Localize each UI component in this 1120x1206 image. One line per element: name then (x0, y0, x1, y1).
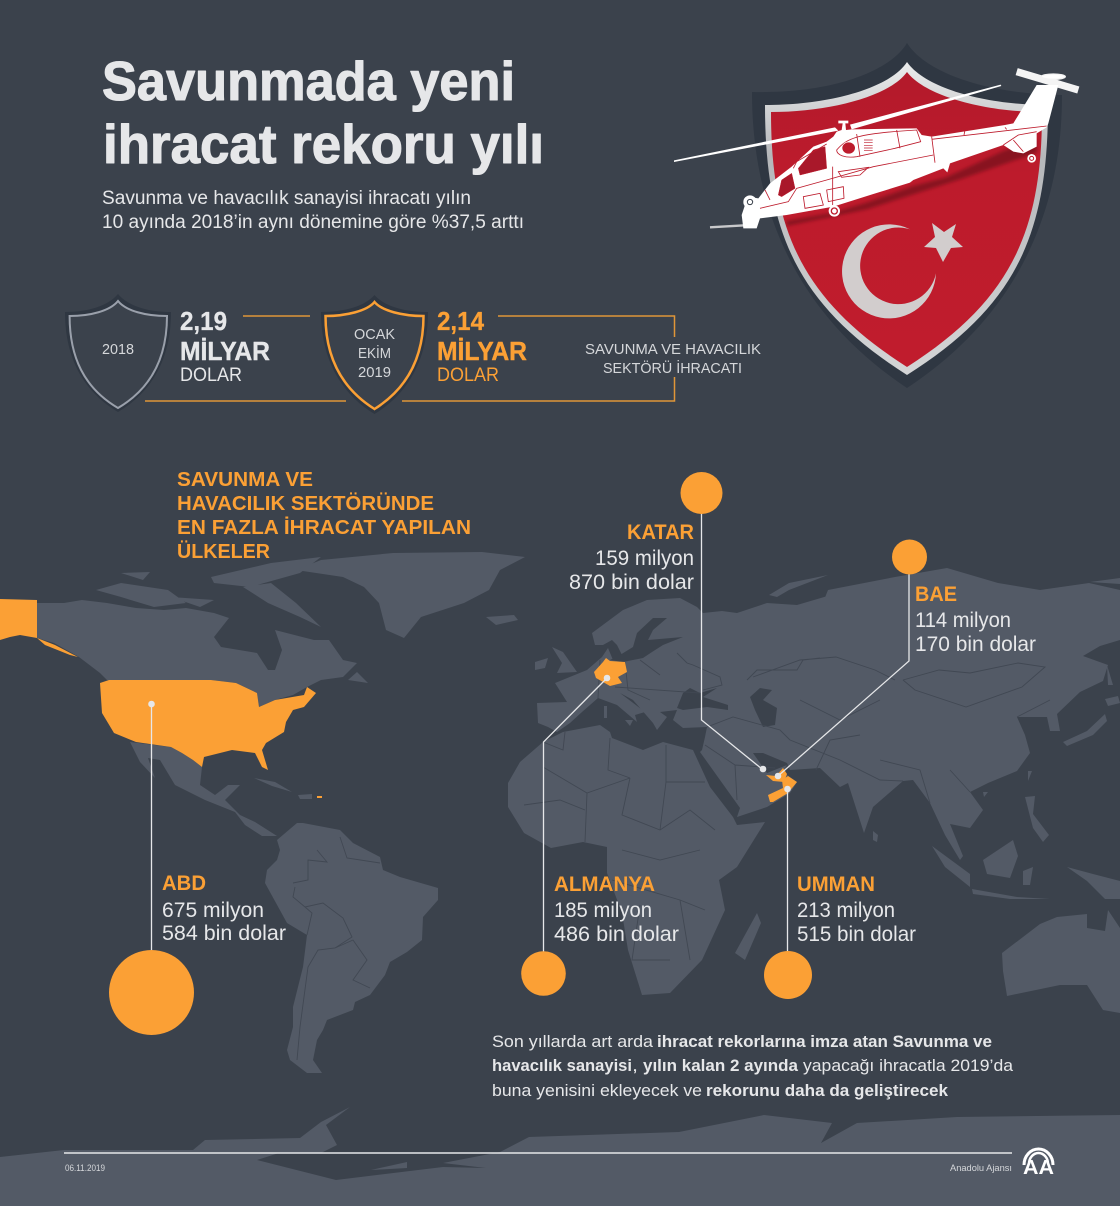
land: Antarctic island (371, 1162, 407, 1170)
shield dark outer (752, 43, 1062, 388)
panel lines (760, 126, 1047, 208)
land: South America (265, 823, 438, 1073)
label (554, 873, 679, 946)
subtitle: 10 ayında 2018’in aynı dönemine göre %37,5 arttı (102, 212, 524, 233)
land: Africa (508, 725, 765, 995)
stat 2018 value (180, 306, 270, 386)
closing paragraph: , (632, 1056, 638, 1075)
fuselage (742, 85, 1058, 228)
location dot (148, 701, 155, 707)
stat 2018 value: DOLAR (180, 365, 242, 386)
leader line (778, 572, 909, 776)
leader line (786, 789, 788, 953)
label: BAE (915, 583, 957, 606)
land: Canada (37, 600, 357, 707)
section heading: EN FAZLA İHRACAT YAPILAN (177, 516, 471, 539)
subtitle: Savunma ve havacılık sanayisi ihracatı yılın (102, 188, 471, 209)
label (797, 873, 916, 946)
label: 515 bin dolar (797, 923, 916, 946)
footer rule (64, 1152, 1012, 1154)
stat 2019 value (437, 306, 527, 386)
label: 114 milyon (915, 609, 1011, 632)
closing paragraph: ihracat rekorlarına imza atan Savunma ve (657, 1032, 992, 1051)
location dot (760, 766, 766, 772)
label: 159 milyon (595, 547, 694, 570)
land: Antarctica (0, 1107, 1120, 1206)
value circle (892, 540, 927, 574)
highlighted: Germany (594, 658, 627, 686)
shield silver border (765, 62, 1048, 375)
main rotor blades (674, 85, 1001, 162)
leader line (150, 704, 152, 952)
tail wheel (1027, 154, 1036, 163)
section heading: HAVACILIK SEKTÖRÜNDE (177, 492, 434, 515)
label period: EKİM (358, 344, 391, 362)
label period (354, 326, 395, 381)
callout: Almanya (521, 675, 679, 996)
closing paragraph: yapacağı ihracatla 2019’da (803, 1056, 1014, 1075)
label: ABD (162, 872, 206, 895)
callout: ABD (109, 701, 286, 1035)
location dot (604, 675, 610, 681)
label: 213 milyon (797, 899, 895, 922)
subtitle (102, 188, 524, 233)
label (915, 583, 1036, 656)
highlighted: UAE (766, 768, 787, 782)
closing paragraph: buna yenisini ekleyecek ve (492, 1081, 702, 1100)
cockpit windows (778, 147, 827, 197)
value circle (680, 472, 722, 514)
label period: OCAK (354, 326, 395, 343)
shield 2018 (65, 294, 171, 412)
land: Mexico and Central America (130, 742, 277, 836)
closing paragraph (492, 1032, 1014, 1100)
label: 870 bin dolar (569, 571, 694, 594)
exhaust grille (864, 140, 873, 151)
sensor eye (842, 142, 855, 154)
bracket lines (145, 316, 674, 401)
stat 2019 value: 2,14 (437, 306, 484, 336)
section heading: ÜLKELER (177, 540, 271, 563)
shield outline (326, 302, 424, 409)
sea: Baltic, Black, Caspian (610, 618, 777, 727)
label: 584 bin dolar (162, 922, 286, 945)
footer date: 06.11.2019 (65, 1163, 105, 1174)
seas cut into land (610, 618, 777, 727)
shield red field (771, 72, 1042, 367)
label: 486 bin dolar (554, 923, 679, 946)
stat 2018 value: MİLYAR (180, 336, 270, 366)
callout: Katar (569, 472, 766, 772)
large shield with Turkish flag (752, 43, 1062, 388)
title: Savunmada yeni (102, 50, 515, 112)
value circle (764, 951, 812, 999)
stat 2019 value: MİLYAR (437, 336, 527, 366)
value circle (109, 950, 194, 1035)
location dot (784, 786, 791, 792)
highlighted: Oman (768, 776, 797, 802)
label (569, 521, 694, 594)
leader line (702, 512, 762, 769)
label 2018: 2018 (102, 342, 134, 358)
title (102, 50, 544, 175)
label period: 2019 (358, 364, 391, 381)
label (162, 872, 286, 945)
value circle (521, 951, 566, 996)
label: UMMAN (797, 873, 875, 896)
location dot (775, 773, 781, 779)
leader line (544, 678, 607, 953)
stat 2018 value: 2,19 (180, 306, 227, 336)
nose sensor (743, 195, 757, 209)
helicopter shadow on shield (787, 139, 1037, 226)
sector label: SEKTÖRÜ İHRACATI (603, 359, 742, 377)
label: KATAR (627, 521, 694, 544)
highlighted: USA Alaska (0, 599, 78, 657)
tail rotor (1017, 72, 1078, 90)
highlighted: Puerto Rico (317, 796, 322, 798)
main wheel (829, 205, 840, 217)
callout: Umman (764, 786, 916, 999)
label: 170 bin dolar (915, 633, 1036, 656)
sector label (585, 341, 761, 377)
logo: Anadolu Ajansı (1023, 1149, 1054, 1179)
label: 185 milyon (554, 899, 652, 922)
shield 2019 (321, 295, 428, 414)
land: Australia (1002, 910, 1120, 1013)
world map (0, 552, 1120, 1206)
shield dark outer (65, 294, 171, 412)
crescent (842, 224, 936, 318)
section heading (177, 469, 471, 563)
country borders (293, 653, 1050, 1060)
land: Greenland (296, 552, 525, 638)
callout: BAE (775, 540, 1036, 779)
land: Iceland (486, 615, 518, 625)
shield dark outer (321, 295, 428, 414)
gun barrel (710, 225, 745, 227)
highlighted: USA mainland (100, 680, 316, 770)
land: Arctic islands (96, 557, 368, 683)
closing paragraph: Son yıllarda art arda (492, 1032, 654, 1051)
label: 675 milyon (162, 899, 264, 922)
title: ihracat rekoru yılı (103, 113, 544, 175)
star (924, 223, 963, 262)
section heading: SAVUNMA VE (177, 469, 313, 491)
label: ALMANYA (554, 873, 655, 896)
land: Caribbean islands (254, 778, 312, 799)
footer credit: Anadolu Ajansı (950, 1163, 1012, 1174)
land: islands around Eurasia and Africa (604, 575, 1120, 960)
stat 2019 value: DOLAR (437, 365, 499, 386)
land: Eurasia (537, 568, 1120, 860)
closing paragraph: rekorunu daha da geliştirecek (706, 1081, 949, 1100)
logo: Anadolu Ajansı: AA (1023, 1157, 1054, 1179)
shield outline (70, 301, 167, 408)
closing paragraph: havacılık sanayisi (492, 1056, 632, 1075)
helicopter illustration (674, 72, 1078, 228)
sector label: SAVUNMA VE HAVACILIK (585, 341, 761, 358)
closing paragraph: yılın kalan 2 ayında (643, 1056, 799, 1075)
land: British Isles (535, 647, 577, 673)
